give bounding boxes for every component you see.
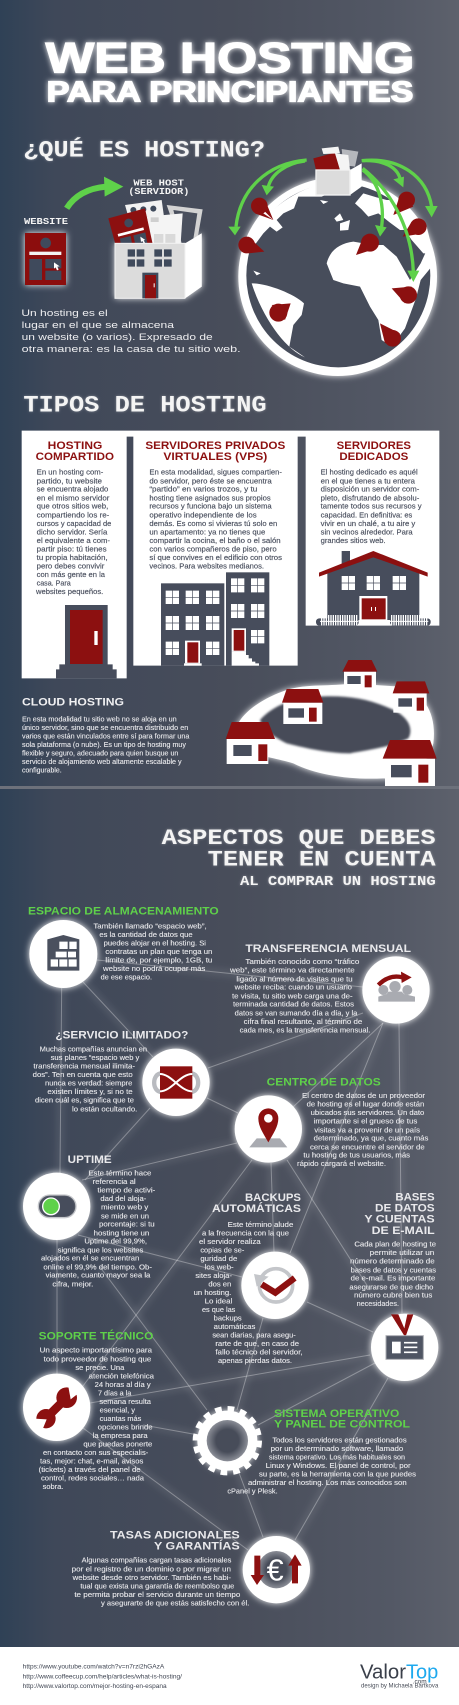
item: bases de datos y cuentas de e-mail: de e-mail. Es importante bbox=[351, 1274, 435, 1283]
item: soporte técnico: la empresa para bbox=[93, 1431, 149, 1440]
item: uptime: dad del aloja- bbox=[100, 1194, 147, 1203]
panel: servidores privados virtuales: SERVIDORES PRIVADOS bbox=[145, 440, 286, 452]
item: sistema operativo y panel de control: Y PANEL DE CONTROL bbox=[274, 1419, 410, 1431]
item: uptime: referencia al bbox=[93, 1177, 136, 1186]
main title: WEB HOSTING bbox=[46, 35, 414, 83]
cloud hosting text bbox=[22, 696, 190, 774]
item: backups automáticas: copias de se- bbox=[200, 1245, 245, 1254]
item: tasas adicionales y garantías: website desde otro servidor. También es habi- bbox=[72, 1573, 232, 1582]
item: backups automáticas: es que las bbox=[202, 1305, 236, 1314]
panel: servidores dedicados: pleto, disfrutando de absolu- bbox=[321, 493, 420, 502]
item: backups automáticas: a la frecuencia con la que bbox=[202, 1228, 289, 1237]
item: transferencia mensual: TRANSFERENCIA MENSUAL bbox=[245, 943, 411, 955]
icon: gear bbox=[195, 1409, 259, 1473]
cloud hosting text: sola plataforma (o nube). Es un tipo de hosting muy bbox=[22, 740, 186, 749]
icon: euro: € bbox=[267, 1554, 284, 1588]
panel: servidores privados virtuales: un apartamento: ya no tienes que bbox=[149, 527, 265, 536]
item: bases de datos y cuentas de e-mail: número determinado de bbox=[350, 1257, 435, 1266]
item: backups automáticas: dos en bbox=[208, 1280, 231, 1289]
item: servicio ilimitado: dos”. Ten en cuenta que esto bbox=[33, 1070, 133, 1079]
icon: id badge bbox=[371, 1314, 438, 1381]
item: soporte técnico: semana resulta bbox=[99, 1397, 152, 1406]
item: centro de datos: determinado, ya que, cuanto más bbox=[314, 1134, 429, 1143]
item: servicio ilimitado: Muchas compañías anuncian en bbox=[40, 1044, 147, 1053]
item: uptime: tiempo de activi- bbox=[97, 1186, 156, 1195]
panel: hosting types bbox=[22, 431, 439, 678]
panel: servidores privados virtuales: demás. Es como si vivieras tú solo en bbox=[149, 519, 277, 528]
icon: location pin bbox=[235, 1095, 302, 1163]
item: backups automáticas: backups bbox=[214, 1314, 242, 1323]
item: centro de datos bbox=[235, 1077, 429, 1168]
heading: ¿qué es hosting?: ¿QUÉ ES HOSTING? bbox=[23, 137, 265, 165]
item: backups automáticas: BACKUPS bbox=[245, 1192, 301, 1204]
footer bbox=[0, 1647, 459, 1705]
item: transferencia mensual: web”, este término va directamente bbox=[229, 966, 355, 975]
item: backups automáticas: AUTOMÁTICAS bbox=[212, 1202, 301, 1215]
item: espacio de almacenamiento: límite de, por ejemplo, 1GB, tu bbox=[105, 956, 212, 965]
item: tasas adicionales y garantías bbox=[72, 1530, 310, 1607]
map pins bbox=[238, 192, 427, 347]
panel: hosting compartido: dicho servidor. Sería bbox=[37, 527, 108, 536]
item: backups automáticas: guridad de bbox=[200, 1254, 237, 1263]
item: servicio ilimitado bbox=[33, 1029, 210, 1116]
text: what is hosting: lugar en el que se almacena bbox=[22, 320, 175, 330]
item: transferencia mensual: cada mes, es la transferencia mensual. bbox=[240, 1025, 370, 1034]
panel: servidores dedicados: sin vecinos alrededor. Para bbox=[321, 527, 414, 536]
item: backups automáticas: apenas pierdas datos. bbox=[218, 1356, 292, 1365]
icon: wrench bbox=[23, 1374, 90, 1441]
panel: hosting compartido: con más gente en la bbox=[37, 570, 106, 579]
item: sistema operativo y panel de control: cPanel y Plesk. bbox=[227, 1486, 278, 1495]
item: espacio de almacenamiento: ESPACIO DE ALMACENAMIENTO bbox=[28, 906, 219, 918]
item: uptime: online el 99,9% del tiempo. Ob- bbox=[43, 1262, 153, 1271]
item: soporte técnico: opciones brinde bbox=[98, 1423, 153, 1432]
item: sistema operativo y panel de control: administrar el hosting. Los más conocidos son bbox=[248, 1478, 407, 1487]
text: what is hosting: Un hosting es el bbox=[21, 308, 108, 318]
item: soporte técnico: control, redes sociales… nada bbox=[41, 1474, 145, 1483]
item: tasas adicionales y garantías: TASAS ADICIONALES bbox=[110, 1530, 240, 1542]
item: sistema operativo y panel de control bbox=[195, 1408, 416, 1495]
house 3 bbox=[393, 681, 429, 713]
item: bases de datos y cuentas de e-mail: Cada plan de hosting te bbox=[354, 1240, 436, 1249]
heading: aspectos bbox=[162, 826, 437, 890]
panel: hosting compartido: En un hosting com- bbox=[37, 468, 104, 477]
panel: servidores dedicados: DEDICADOS bbox=[339, 451, 409, 463]
item: centro de datos: de hosting es el lugar donde están bbox=[307, 1100, 424, 1109]
item: soporte técnico: Un aspecto importantísimo para bbox=[40, 1346, 153, 1355]
house 4 bbox=[226, 722, 275, 764]
heading: aspectos: ASPECTOS QUE DEBES bbox=[162, 826, 436, 851]
item: espacio de almacenamiento: website no podrá ocupar más bbox=[102, 964, 206, 973]
panel: servidores privados virtuales: “partido” en varios trozos, y tu bbox=[149, 485, 257, 494]
item: uptime: cifra, mejor. bbox=[52, 1279, 93, 1288]
panel: hosting compartido: el equivalente a com- bbox=[37, 536, 111, 545]
item: bases de datos y cuentas de e-mail bbox=[349, 1192, 438, 1381]
icon: toggle bbox=[23, 1173, 90, 1240]
text: what is hosting: un website (o varios). Expresado de bbox=[22, 332, 213, 342]
item: bases de datos y cuentas de e-mail: bases de datos y cuentas bbox=[351, 1265, 436, 1274]
house 1 bbox=[342, 660, 377, 689]
green arrows bbox=[228, 160, 438, 282]
panel: hosting compartido: HOSTING bbox=[48, 440, 103, 452]
item: espacio de almacenamiento: es la cantidad de datos que bbox=[99, 930, 193, 939]
panel: hosting compartido bbox=[35, 440, 117, 678]
item: bases de datos y cuentas de e-mail: DE E-MAIL bbox=[372, 1225, 435, 1237]
item: uptime: Este término hace bbox=[88, 1169, 151, 1178]
panel: servidores dedicados: capacidad. En definitiva: es bbox=[321, 510, 413, 519]
icon: backup check bbox=[241, 1252, 309, 1319]
item: uptime bbox=[23, 1154, 156, 1288]
item: bases de datos y cuentas de e-mail: DE DATOS bbox=[375, 1203, 435, 1215]
panel: hosting compartido: casa. Para bbox=[37, 578, 71, 587]
item: transferencia mensual: terminada cantidad de datos. Estos bbox=[233, 1000, 354, 1009]
cloud hosting text: En esta modalidad tu sitio web no se aloja en un bbox=[22, 714, 177, 723]
footer: source links: http://www.valortop.com/mejor-hosting-en-espana bbox=[23, 1683, 167, 1690]
heading: aspectos: AL COMPRAR UN HOSTING bbox=[240, 874, 436, 890]
section divider bbox=[0, 786, 459, 789]
panel: hosting compartido: tu propia habitación, bbox=[37, 553, 108, 562]
item: backups automáticas: automáticas bbox=[214, 1322, 256, 1331]
icon: storage bbox=[29, 920, 97, 988]
item: backups automáticas: rarte de que, en caso de bbox=[215, 1339, 299, 1348]
item: sistema operativo y panel de control: Todos los servidores están gestionados bbox=[272, 1435, 407, 1444]
item: backups automáticas: el servidor realiza bbox=[199, 1237, 262, 1246]
cloud hosting text: varios que están vinculados entre sí para formar una bbox=[22, 731, 190, 740]
panel: servidores privados virtuales: con varios compañeros de piso, pero bbox=[149, 544, 277, 553]
panel: servidores privados virtuales: recursos y funciona bajo un sistema bbox=[149, 502, 273, 511]
panel: hosting compartido: se encuentra alojado bbox=[37, 485, 108, 494]
panel: hosting compartido: websites pequeños. bbox=[35, 587, 103, 596]
panel: servidores privados virtuales: sí que convives en el edificio con otros bbox=[149, 553, 282, 562]
panel: hosting compartido: partir piso: tú tienes bbox=[37, 544, 107, 553]
item: soporte técnico: esencial, y bbox=[100, 1406, 135, 1415]
item: uptime: hosting tiene un bbox=[94, 1228, 149, 1237]
item: sistema operativo y panel de control: sistema operativo. Los más habituales son bbox=[269, 1452, 405, 1461]
item: centro de datos: El centro de datos de un proveedor bbox=[302, 1091, 426, 1100]
item: uptime: alojados en él se encuentran bbox=[41, 1254, 139, 1263]
item: backups automáticas: sean diarias, para asegu- bbox=[212, 1331, 296, 1340]
globe bbox=[238, 177, 437, 376]
icon: door bbox=[56, 605, 117, 678]
item: sistema operativo y panel de control: SISTEMA OPERATIVO bbox=[274, 1408, 400, 1420]
item: espacio de almacenamiento: de ese espacio. bbox=[101, 973, 152, 982]
item: soporte técnico: atención telefónica bbox=[89, 1371, 155, 1380]
icon: traffic bbox=[362, 956, 430, 1024]
footer: valortop logo: .com bbox=[413, 1680, 427, 1686]
item: transferencia mensual: te visita, tu sitio web carga una de- bbox=[232, 991, 353, 1000]
icon: apartment buildings bbox=[161, 572, 269, 666]
item: soporte técnico: 7 días a la bbox=[98, 1388, 132, 1397]
icon: infinity bbox=[142, 1049, 210, 1116]
panel: servidores privados virtuales: compartir la cocina, el baño o el salón bbox=[149, 536, 281, 545]
connecting network lines bbox=[57, 960, 402, 1550]
item: sistema operativo y panel de control: por un determinado software, llamado bbox=[271, 1444, 403, 1453]
panel: hosting compartido: partido, tu website bbox=[37, 476, 102, 485]
heading: aspectos: TENER EN CUENTA bbox=[208, 848, 437, 873]
panel: hosting compartido: pero debes convivir bbox=[37, 561, 105, 570]
panel: servidores privados virtuales: vecinos. Para websites medianos. bbox=[149, 561, 264, 570]
item: soporte técnico: que puedas ponerte bbox=[83, 1440, 152, 1449]
item: centro de datos: CENTRO DE DATOS bbox=[267, 1077, 381, 1089]
item: centro de datos: rápido cargará el website. bbox=[297, 1159, 386, 1168]
item: servicio ilimitado: transferencia mensual ilimita- bbox=[33, 1061, 136, 1070]
panel: servidores dedicados: tamente todos sus recursos y bbox=[321, 502, 422, 511]
item: espacio de almacenamiento: puedes alojar en el hosting. Si bbox=[104, 939, 206, 948]
item: centro de datos: cerca se encuentre el servidor de bbox=[310, 1142, 425, 1151]
text: what is hosting: otra manera: es la casa de tu sitio web. bbox=[22, 344, 241, 354]
item: uptime: se mide en un bbox=[101, 1211, 149, 1220]
panel: servidores dedicados: disposición un servidor com- bbox=[321, 485, 420, 494]
item: uptime: viamente, cuanto mayor sea la bbox=[46, 1271, 151, 1280]
icon: server box on globe bbox=[313, 147, 362, 195]
icon: house bbox=[316, 551, 431, 626]
item: servicio ilimitado: existen límites y, si no te bbox=[47, 1087, 133, 1096]
panel: hosting compartido: COMPARTIDO bbox=[36, 451, 114, 463]
main title: PARA PRINCIPIANTES bbox=[47, 77, 413, 109]
house 5 bbox=[383, 740, 437, 786]
item: soporte técnico: todo proveedor de hosting que bbox=[44, 1354, 151, 1363]
item: bases de datos y cuentas de e-mail: BASES bbox=[395, 1192, 435, 1204]
item: transferencia mensual: website reciba: cuando un usuario bbox=[234, 983, 352, 992]
item: tasas adicionales y garantías: te permita probar el servicio durante un tiempo bbox=[74, 1590, 240, 1599]
item: centro de datos: ubicados sus servidores. Un dato bbox=[311, 1108, 424, 1117]
panel: servidores dedicados: grandes sitios web. bbox=[321, 536, 386, 545]
item: tasas adicionales y garantías: y asegurarte de que estás satisfecho con él. bbox=[101, 1598, 249, 1607]
item: bases de datos y cuentas de e-mail: Y CUENTAS bbox=[364, 1214, 435, 1226]
item: soporte técnico: en contacto con sus especialis- bbox=[43, 1448, 149, 1457]
footer: source links: http://www.coffeecup.com/help/articles/what-is-hosting/ bbox=[23, 1673, 182, 1680]
panel: servidores privados virtuales: VIRTUALES (VPS) bbox=[163, 451, 268, 463]
item: soporte técnico: sobra. bbox=[43, 1482, 63, 1491]
item: servicio ilimitado: lo están ocultando. bbox=[72, 1104, 137, 1113]
item: tasas adicionales y garantías: Y GARANTÍAS bbox=[154, 1540, 240, 1553]
item: backups automáticas: fallo técnico del servidor, bbox=[215, 1348, 303, 1357]
label: web host: (SERVIDOR) bbox=[128, 186, 189, 197]
panel: servidores privados virtuales: hosting tiene asignados sus propios bbox=[149, 493, 271, 502]
panel: hosting compartido: cursos y capacidad de bbox=[37, 519, 111, 528]
footer: source links: https://www.youtube.com/watch?v=n7rzi2hGAzA bbox=[23, 1663, 165, 1670]
panel: servidores dedicados: SERVIDORES bbox=[337, 440, 411, 452]
item: uptime: miento web y bbox=[101, 1203, 149, 1212]
footer: valortop logo: design by Michaela Bartkova bbox=[361, 1684, 439, 1690]
panel: hosting compartido: en el mismo servidor bbox=[37, 493, 110, 502]
cloud hosting text: CLOUD HOSTING bbox=[22, 696, 124, 708]
panel: hosting compartido: que otros sitios web, bbox=[37, 502, 108, 511]
heading: tipos de hosting: TIPOS DE HOSTING bbox=[23, 394, 267, 420]
item: backups automáticas: los web- bbox=[205, 1262, 234, 1271]
panel: servidores privados virtuales: En esta modalidad, sigues compartien- bbox=[149, 468, 283, 477]
panel: servidores privados virtuales bbox=[145, 440, 286, 666]
footer: valortop logo: Top bbox=[406, 1660, 438, 1683]
item: soporte técnico: tas, mejor: chat, e-mail, avisos bbox=[40, 1457, 144, 1466]
item: soporte técnico: cuantas más bbox=[100, 1414, 142, 1423]
item: backups automáticas: un hosting. bbox=[194, 1288, 231, 1297]
item: servicio ilimitado: nunca es verdad: siempre bbox=[45, 1079, 132, 1088]
cloud hosting text: servicio de alojamiento web altamente escalable y bbox=[22, 757, 182, 766]
icon: web host building bbox=[108, 200, 203, 298]
item: espacio de almacenamiento bbox=[28, 906, 219, 988]
panel: servidores dedicados bbox=[316, 440, 431, 626]
footer: valortop logo bbox=[360, 1660, 439, 1690]
item: servicio ilimitado: ¿SERVICIO ILIMITADO? bbox=[55, 1029, 189, 1041]
cloud hosting text: único servidor, sino que se encuentra distribuido en bbox=[22, 723, 188, 732]
globe illustration bbox=[228, 147, 438, 376]
item: soporte técnico bbox=[23, 1330, 155, 1491]
item: bases de datos y cuentas de e-mail: permite utilizar un bbox=[370, 1248, 434, 1257]
cloud hosting text: configurable. bbox=[22, 765, 62, 774]
item: transferencia mensual: También conocido como “tráfico bbox=[245, 957, 359, 966]
item: backups automáticas: Lo ideal bbox=[205, 1297, 233, 1306]
icon: website page bbox=[25, 233, 66, 285]
item: soporte técnico: (tickets) a través del panel de bbox=[39, 1465, 141, 1474]
panel: servidores dedicados: El hosting dedicado es aquél bbox=[321, 468, 418, 477]
house 2 bbox=[282, 689, 323, 724]
item: soporte técnico: se precie. Una bbox=[75, 1363, 125, 1372]
item: uptime: Uptime del 99,9%, bbox=[84, 1237, 147, 1246]
item: backups automáticas: sites aloja- bbox=[195, 1271, 233, 1280]
item: centro de datos: importante si el grueso de tus bbox=[314, 1117, 418, 1126]
item: tasas adicionales y garantías: por el registro de un dominio o por migrar un bbox=[72, 1564, 231, 1573]
item: tasas adicionales y garantías: Algunas compañías cargan tasas adicionales bbox=[82, 1556, 232, 1565]
item: bases de datos y cuentas de e-mail: necesidades. bbox=[357, 1299, 399, 1308]
cloud hosting text: flexible y seguro, adecuado para quien busque un bbox=[22, 748, 178, 757]
item: transferencia mensual bbox=[229, 943, 430, 1034]
footer: source links bbox=[23, 1663, 182, 1690]
panel: hosting compartido: compartiendo los re- bbox=[37, 510, 110, 519]
label: website: WEBSITE bbox=[24, 216, 68, 227]
item: sistema operativo y panel de control: Linux y Windows. El panel de control, por bbox=[266, 1461, 411, 1470]
item: bases de datos y cuentas de e-mail: asegurarse de que dicho bbox=[349, 1282, 433, 1291]
cloud illustration: houses on white road bbox=[226, 660, 437, 786]
item: uptime: porcentaje: si tu bbox=[99, 1220, 155, 1229]
item: transferencia mensual: datos se van sumando día a día, y la bbox=[235, 1008, 358, 1017]
label: web host: WEB HOST bbox=[133, 177, 184, 188]
item: uptime: significa que los websites bbox=[58, 1245, 144, 1254]
main title bbox=[46, 35, 414, 109]
item: centro de datos: tu hosting de tus usuarios, más bbox=[303, 1151, 410, 1160]
item: espacio de almacenamiento: También llamado “espacio web”, bbox=[93, 921, 207, 930]
item: servicio ilimitado: sus planes “espacio web y bbox=[51, 1053, 140, 1062]
item: backups automáticas bbox=[194, 1192, 309, 1365]
item: bases de datos y cuentas de e-mail: número cubre bien tus bbox=[354, 1291, 433, 1300]
item: transferencia mensual: cifra final resultante, al término de bbox=[244, 1017, 362, 1026]
item: servicio ilimitado: dicen cuál es, significa que te bbox=[35, 1096, 134, 1105]
text: what is hosting bbox=[21, 308, 241, 354]
item: soporte técnico: 24 horas al día y bbox=[95, 1380, 151, 1389]
panel: servidores dedicados: vivir en un chalé, a tu aire y bbox=[321, 519, 416, 528]
panel: servidores privados virtuales: do servidor, pero éste se encuentra bbox=[149, 476, 273, 485]
item: tasas adicionales y garantías: tual que exista una garantía de reembolso que bbox=[80, 1581, 234, 1590]
footer: valortop logo: Valor bbox=[360, 1660, 406, 1683]
item: centro de datos: visitas va a provenir de un país bbox=[314, 1125, 420, 1134]
item: sistema operativo y panel de control: su parte, es la herramienta con la que puedes bbox=[259, 1469, 416, 1478]
item: uptime: UPTIME bbox=[68, 1154, 112, 1166]
item: espacio de almacenamiento: contratas un plan que tenga un bbox=[105, 947, 212, 956]
icon: euro bbox=[243, 1536, 310, 1603]
item: backups automáticas: Este término alude bbox=[228, 1220, 293, 1229]
label: web host bbox=[128, 177, 189, 197]
panel: servidores dedicados: en el que tienes a tu entera bbox=[321, 476, 416, 485]
panel: servidores privados virtuales: operativo independiente de los bbox=[149, 510, 257, 519]
item: soporte técnico: SOPORTE TÉCNICO bbox=[39, 1330, 154, 1343]
arrow: website to host bbox=[67, 177, 123, 208]
item: transferencia mensual: ligado al número de visitas que tu bbox=[236, 974, 353, 983]
